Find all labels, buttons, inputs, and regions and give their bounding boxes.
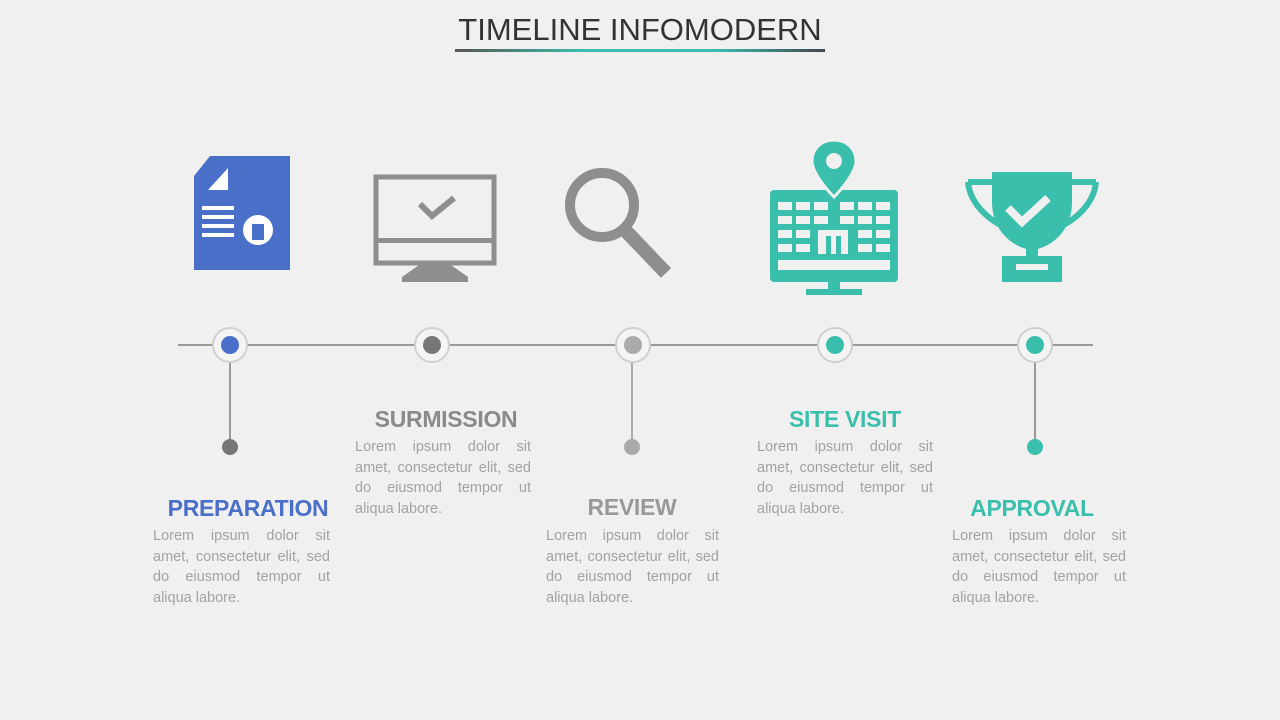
heading: approval: APPROVAL: [970, 495, 1094, 521]
text: submission: Lorem ipsum dolor sit amet, consectetur elit, sed do eiusmod tempor ut aliqua labore.: [355, 439, 531, 517]
heading: preparation: PREPARATION: [168, 495, 328, 521]
icon: monitor check: [374, 174, 496, 282]
icon: trophy: [965, 172, 1099, 282]
text: preparation: Lorem ipsum dolor sit amet, consectetur elit, sed do eiusmod tempor ut aliqua labore.: [153, 528, 330, 606]
title: TIMELINE INFOMODERN: [458, 12, 822, 47]
icon: magnifier: [565, 168, 671, 278]
text: approval: Lorem ipsum dolor sit amet, consectetur elit, sed do eiusmod tempor ut aliqua labore.: [952, 528, 1126, 606]
heading: site visit: SITE VISIT: [789, 406, 901, 432]
icon: site map monitor: [770, 142, 898, 295]
heading: submission: SURMISSION: [375, 406, 517, 432]
text: review: Lorem ipsum dolor sit amet, consectetur elit, sed do eiusmod tempor ut aliqua labore.: [546, 528, 719, 606]
heading: review: REVIEW: [588, 494, 676, 520]
icon: document: [194, 156, 290, 270]
text: site visit: Lorem ipsum dolor sit amet, consectetur elit, sed do eiusmod tempor ut aliqua labore.: [757, 439, 933, 517]
